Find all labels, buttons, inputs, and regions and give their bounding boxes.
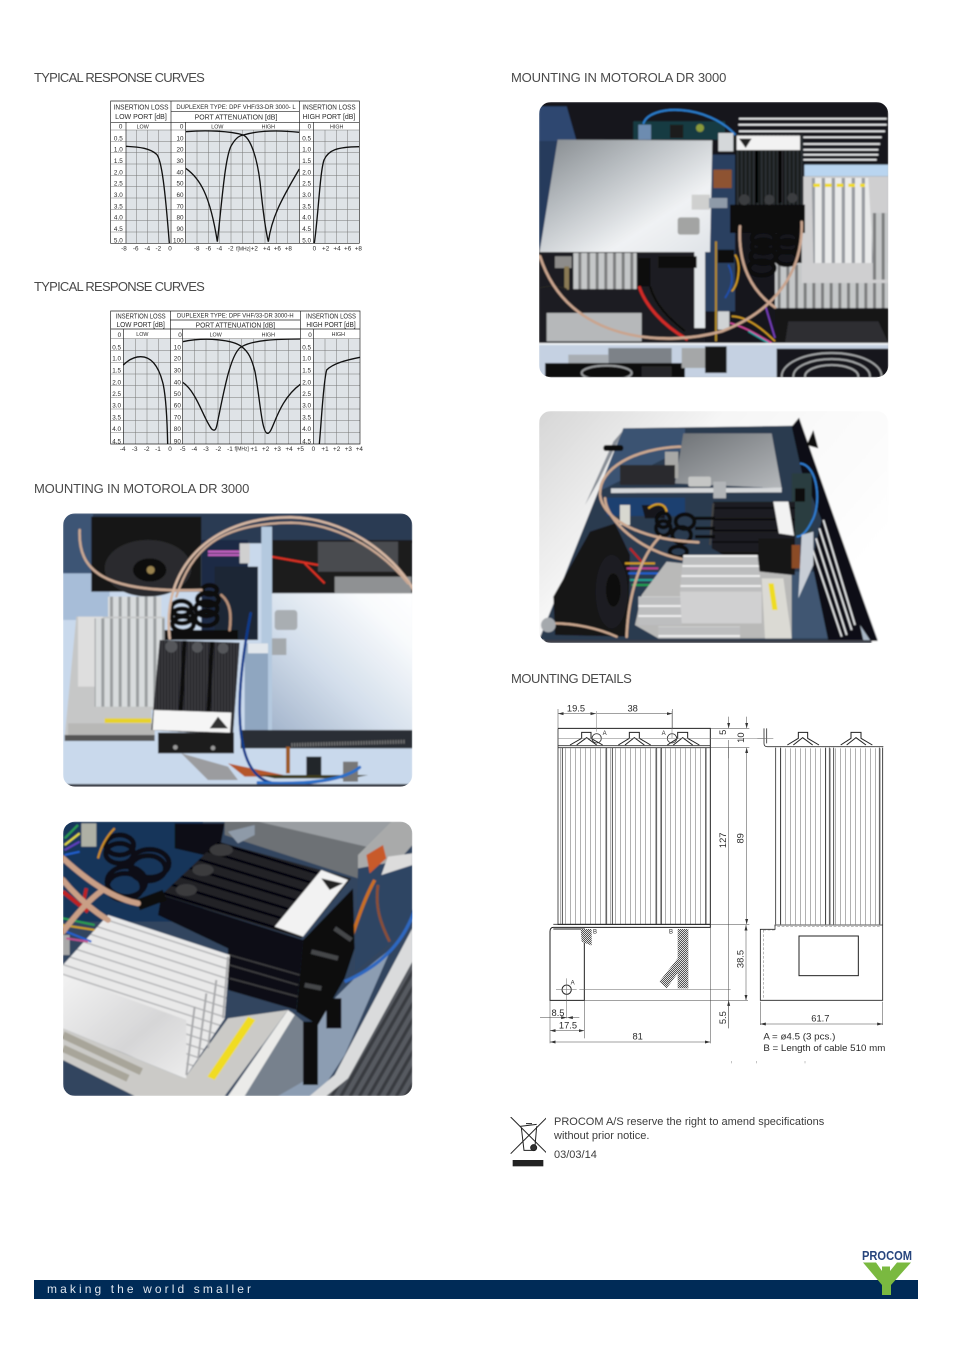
chart: response curves DPF VHF/33-DR 3000-L: 3.0 xyxy=(114,192,123,199)
cable: blue top xyxy=(643,110,737,136)
dimension labels: A xyxy=(571,980,575,986)
chart: response curves DPF VHF/33-DR 3000-L: 0 xyxy=(308,124,312,131)
chart: response curves DPF VHF/33-DR 3000-H: LOW xyxy=(136,332,149,338)
chart: response curves DPF VHF/33-DR 3000-L: 1.5 xyxy=(302,158,312,165)
logo: Procom xyxy=(862,1249,912,1295)
chart: response curves DPF VHF/33-DR 3000-H: 0 xyxy=(308,332,312,339)
chart: response curves DPF VHF/33-DR 3000-H: -2 xyxy=(216,446,222,453)
cables xyxy=(63,858,138,932)
chart: response curves DPF VHF/33-DR 3000-L: HIGH xyxy=(262,124,275,130)
chart: response curves DPF VHF/33-DR 3000-H: 10 xyxy=(174,344,181,351)
chart: response curves DPF VHF/33-DR 3000-H: HIGH xyxy=(332,332,345,338)
dimension labels: A xyxy=(662,731,666,737)
icon: WEEE crossed-out bin xyxy=(510,1117,546,1166)
chart: response curves DPF VHF/33-DR 3000-L: f[MHz] xyxy=(236,246,251,252)
chart: response curves DPF VHF/33-DR 3000-H: -5 xyxy=(180,446,186,453)
dimension labels: 81 xyxy=(632,1032,643,1042)
chart: response curves DPF VHF/33-DR 3000-H: -3 xyxy=(203,446,209,453)
dimension labels: 17.5 xyxy=(559,1020,577,1030)
chart: response curves DPF VHF/33-DR 3000-H: 0.5 xyxy=(112,344,122,351)
chart: response curves DPF VHF/33-DR 3000-L xyxy=(110,100,362,253)
chart: response curves DPF VHF/33-DR 3000-L: 2.5 xyxy=(302,181,312,188)
PCB xyxy=(633,121,725,140)
dimension labels: 89 xyxy=(736,833,746,844)
footer bar xyxy=(34,1280,918,1299)
rear panel xyxy=(539,344,888,378)
chart: response curves DPF VHF/33-DR 3000-H: 4.0 xyxy=(302,426,312,433)
cables xyxy=(553,447,698,637)
photo: duplexer mounted, top view xyxy=(63,513,412,787)
chart: response curves DPF VHF/33-DR 3000-L: 5.0 xyxy=(114,237,123,244)
chart: response curves DPF VHF/33-DR 3000-H: 0 xyxy=(312,446,316,453)
chart: response curves DPF VHF/33-DR 3000-H: 60 xyxy=(174,403,181,410)
chart: response curves DPF VHF/33-DR 3000-L: +4 xyxy=(333,246,341,253)
fan xyxy=(91,517,201,597)
cables xyxy=(581,929,592,946)
chassis xyxy=(539,426,878,640)
chart: response curves DPF VHF/33-DR 3000-H: 0.5 xyxy=(302,344,312,351)
heading: typical response curves 2: TYPICAL RESPONSE CURVES xyxy=(34,279,204,294)
cable: red xyxy=(639,286,688,340)
coils xyxy=(106,835,169,900)
fan xyxy=(785,310,888,342)
chart: response curves DPF VHF/33-DR 3000-H: HIGH xyxy=(262,332,275,338)
chart: response curves DPF VHF/33-DR 3000-H: -3 xyxy=(132,446,138,453)
chart: response curves DPF VHF/33-DR 3000-H: 80 xyxy=(174,426,181,433)
chart: response curves DPF VHF/33-DR 3000-H: 20 xyxy=(174,356,181,363)
chart: response curves DPF VHF/33-DR 3000-H: 1.5 xyxy=(302,368,312,375)
text block: legal notice: 03/03/14 xyxy=(554,1149,597,1161)
tagline: making the world smaller xyxy=(47,1282,254,1296)
chart: response curves DPF VHF/33-DR 3000-H: LOW PORT [dB] xyxy=(116,320,165,329)
chart: response curves DPF VHF/33-DR 3000-L: 10 xyxy=(176,135,184,142)
dimension labels: B xyxy=(669,930,673,936)
cables xyxy=(80,517,415,784)
chart: response curves DPF VHF/33-DR 3000-L: -8 xyxy=(121,246,127,253)
silver power supply xyxy=(540,140,727,328)
chart: response curves DPF VHF/33-DR 3000-L: 40 xyxy=(176,169,184,176)
fan xyxy=(553,523,630,637)
chart: response curves DPF VHF/33-DR 3000-L: 70 xyxy=(176,203,184,210)
cooling vents xyxy=(738,119,887,160)
chart: response curves DPF VHF/33-DR 3000-H: 3.5 xyxy=(112,414,122,421)
chart: response curves DPF VHF/33-DR 3000-L: 100 xyxy=(173,237,184,244)
heat sink xyxy=(65,597,165,741)
heat sink base xyxy=(635,562,792,638)
floor xyxy=(278,952,389,1096)
heading: mounting in Motorola DR 3000 (right): MOUNTING IN MOTOROLA DR 3000 xyxy=(511,70,726,85)
ribbon and rail xyxy=(245,1012,303,1096)
chart: response curves DPF VHF/33-DR 3000-H: +3 xyxy=(274,446,281,453)
chart: response curves DPF VHF/33-DR 3000-H: +3 xyxy=(345,446,352,453)
cable: blue xyxy=(345,910,415,982)
chart: response curves DPF VHF/33-DR 3000-L: INSERTION LOSS xyxy=(114,102,169,111)
chart: response curves DPF VHF/33-DR 3000-L: 3.5 xyxy=(114,203,123,210)
dimension labels: 10 xyxy=(736,732,746,743)
heat sink fins xyxy=(63,915,230,1078)
black plate xyxy=(539,250,705,343)
chart: response curves DPF VHF/33-DR 3000-L: DUPLEXER TYPE: DPF VHF/33-DR 3000- L xyxy=(176,105,296,111)
chart: response curves DPF VHF/33-DR 3000-H: 90 xyxy=(174,438,181,445)
chart: response curves DPF VHF/33-DR 3000-L: HIGH xyxy=(330,124,343,130)
heading: mounting details: MOUNTING DETAILS xyxy=(511,671,631,686)
chart: response curves DPF VHF/33-DR 3000-L: 0 xyxy=(180,124,184,131)
chart: response curves DPF VHF/33-DR 3000-H: f[MHz] xyxy=(234,447,249,453)
chart: response curves DPF VHF/33-DR 3000-L: 2.0 xyxy=(114,169,123,176)
chart: response curves DPF VHF/33-DR 3000-H: 40 xyxy=(174,379,181,386)
base edge xyxy=(543,640,872,643)
chart: response curves DPF VHF/33-DR 3000-H: 50 xyxy=(174,391,181,398)
chart: response curves DPF VHF/33-DR 3000-H: 2.5 xyxy=(302,391,312,398)
chart: response curves DPF VHF/33-DR 3000-H: 70 xyxy=(174,414,181,421)
chart: response curves DPF VHF/33-DR 3000-H: 1.0 xyxy=(302,356,312,363)
chart: response curves DPF VHF/33-DR 3000-H: +4 xyxy=(356,446,363,453)
coils xyxy=(171,585,219,631)
chart: response curves DPF VHF/33-DR 3000-H: HIGH PORT [dB] xyxy=(306,320,356,329)
chart: response curves DPF VHF/33-DR 3000-L: 2.0 xyxy=(302,169,312,176)
dimension labels: 5.5 xyxy=(718,1011,728,1024)
duplexer xyxy=(158,842,355,1025)
dimension labels: 5 xyxy=(718,730,728,735)
photo: duplexer and power supply, top view xyxy=(539,102,888,378)
dimension labels: 8.5 xyxy=(552,1008,564,1018)
heat sink xyxy=(680,555,762,623)
text block: legal notice: without prior notice. xyxy=(554,1130,649,1142)
chart: response curves DPF VHF/33-DR 3000-L: 1.0 xyxy=(114,147,123,154)
heat sink xyxy=(775,176,888,308)
chart: response curves DPF VHF/33-DR 3000-H: +2 xyxy=(262,446,270,453)
chart: response curves DPF VHF/33-DR 3000-H: 0 xyxy=(168,446,172,453)
coils xyxy=(656,513,694,557)
chart: response curves DPF VHF/33-DR 3000-H: 1.5 xyxy=(112,368,122,375)
chart: response curves DPF VHF/33-DR 3000-L: 0.5 xyxy=(302,135,312,142)
front view xyxy=(550,711,763,1018)
chart: response curves DPF VHF/33-DR 3000-L: 1.0 xyxy=(302,147,312,154)
chart: response curves DPF VHF/33-DR 3000-L: 4.5 xyxy=(114,226,123,233)
chart: response curves DPF VHF/33-DR 3000-L: +6 xyxy=(344,246,352,253)
chart: response curves DPF VHF/33-DR 3000-H: -4 xyxy=(192,446,198,453)
fins xyxy=(573,253,637,289)
heading: mounting in Motorola DR 3000 (left): MOUNTING IN MOTOROLA DR 3000 xyxy=(34,481,249,496)
chart: response curves DPF VHF/33-DR 3000-L: 3.0 xyxy=(302,192,312,199)
duplexer xyxy=(730,135,805,233)
heading: typical response curves 1: TYPICAL RESPONSE CURVES xyxy=(34,70,204,85)
chart: response curves DPF VHF/33-DR 3000-L: 0 xyxy=(119,124,123,131)
chart: response curves DPF VHF/33-DR 3000-H: 2.0 xyxy=(112,379,122,386)
text block: legal notice: PROCOM A/S reserve the right to amend specifications xyxy=(554,1116,824,1128)
chart: response curves DPF VHF/33-DR 3000-L: -6 xyxy=(133,246,139,253)
chart: response curves DPF VHF/33-DR 3000-H: 0 xyxy=(118,332,122,339)
chart: response curves DPF VHF/33-DR 3000-H: 3.0 xyxy=(302,403,312,410)
chart: response curves DPF VHF/33-DR 3000-L: 4.5 xyxy=(302,226,312,233)
note: A and B legend xyxy=(763,1032,886,1053)
technical drawing: mounting details xyxy=(540,704,886,1064)
dimension labels: 19.5 xyxy=(567,704,585,714)
side view xyxy=(757,728,883,1000)
chart: response curves DPF VHF/33-DR 3000-L: 90 xyxy=(176,226,184,233)
dimension labels: B xyxy=(593,930,597,936)
cooling vents xyxy=(356,862,412,924)
coils xyxy=(749,231,798,275)
chart: response curves DPF VHF/33-DR 3000-L: +8 xyxy=(355,246,362,253)
chart: response curves DPF VHF/33-DR 3000-L: +4 xyxy=(263,246,271,253)
chart: response curves DPF VHF/33-DR 3000-L: 0 xyxy=(168,246,172,253)
chart: response curves DPF VHF/33-DR 3000-L: 20 xyxy=(176,147,184,154)
PCB xyxy=(607,498,685,525)
logo: Procom: PROCOM xyxy=(862,1249,912,1263)
chart: response curves DPF VHF/33-DR 3000-L: 4.0 xyxy=(302,215,312,222)
chart: response curves DPF VHF/33-DR 3000-H: LOW xyxy=(210,332,223,338)
chart: response curves DPF VHF/33-DR 3000-H: 30 xyxy=(174,368,181,375)
duplexer xyxy=(710,502,795,575)
chart: response curves DPF VHF/33-DR 3000-H: -1 xyxy=(155,446,161,453)
screws xyxy=(570,732,699,745)
chart: response curves DPF VHF/33-DR 3000-H: -1 xyxy=(227,446,233,453)
dimension labels: A xyxy=(603,731,607,737)
chart: response curves DPF VHF/33-DR 3000-H: INSERTION LOSS xyxy=(306,311,356,320)
chart: response curves DPF VHF/33-DR 3000-L: 0.5 xyxy=(114,135,123,142)
chart: response curves DPF VHF/33-DR 3000-H: 4.0 xyxy=(112,426,122,433)
chart: response curves DPF VHF/33-DR 3000-H: INSERTION LOSS xyxy=(116,311,166,320)
chart: response curves DPF VHF/33-DR 3000-L: +2 xyxy=(322,246,330,253)
chart: response curves DPF VHF/33-DR 3000-L: INSERTION LOSS xyxy=(302,102,356,111)
chart: response curves DPF VHF/33-DR 3000-H: +5 xyxy=(297,446,304,453)
dimensions xyxy=(540,709,883,1063)
chart: response curves DPF VHF/33-DR 3000-L: -2 xyxy=(228,246,234,253)
wires xyxy=(625,504,667,585)
text block: legal notice xyxy=(554,1116,824,1161)
chart: response curves DPF VHF/33-DR 3000-H: 4.5 xyxy=(302,438,312,445)
chart: response curves DPF VHF/33-DR 3000-H: DUPLEXER TYPE: DPF VHF/33-DR 3000-H xyxy=(177,313,294,319)
dimension labels: 38 xyxy=(627,704,638,714)
chart: response curves DPF VHF/33-DR 3000-L: +8 xyxy=(285,246,292,253)
chart: response curves DPF VHF/33-DR 3000-H: -2 xyxy=(144,446,150,453)
chart: response curves DPF VHF/33-DR 3000-H: 2.0 xyxy=(302,379,312,386)
heat sink base xyxy=(63,1010,295,1096)
chart: response curves DPF VHF/33-DR 3000-H xyxy=(110,310,363,453)
chart: response curves DPF VHF/33-DR 3000-L: -2 xyxy=(156,246,162,253)
chart: response curves DPF VHF/33-DR 3000-L: 60 xyxy=(176,192,184,199)
chart: response curves DPF VHF/33-DR 3000-L: 50 xyxy=(176,181,184,188)
photo: duplexer mounted, rear perspective xyxy=(539,411,878,643)
chart: response curves DPF VHF/33-DR 3000-L: 4.0 xyxy=(114,215,123,222)
note: A and B legend: B = Length of cable 510 mm xyxy=(763,1043,886,1053)
chart: response curves DPF VHF/33-DR 3000-H: 1.0 xyxy=(112,356,122,363)
chart: response curves DPF VHF/33-DR 3000-L: PORT ATTENUATION [dB] xyxy=(195,112,277,121)
chart: response curves DPF VHF/33-DR 3000-H: +1 xyxy=(321,446,329,453)
chart: response curves DPF VHF/33-DR 3000-H: PORT ATTENUATION [dB] xyxy=(196,320,275,329)
chart: response curves DPF VHF/33-DR 3000-H: 4.5 xyxy=(112,438,122,445)
chart: response curves DPF VHF/33-DR 3000-L: -4 xyxy=(217,246,223,253)
chart: response curves DPF VHF/33-DR 3000-L: -8 xyxy=(194,246,200,253)
cable: blue xyxy=(797,463,817,537)
chart: response curves DPF VHF/33-DR 3000-L: 0 xyxy=(313,246,317,253)
chart: response curves DPF VHF/33-DR 3000-H: 3.0 xyxy=(112,403,122,410)
chart: response curves DPF VHF/33-DR 3000-L: +6 xyxy=(274,246,281,253)
dimension labels: 61.7 xyxy=(811,1014,829,1024)
chart: response curves DPF VHF/33-DR 3000-H: 3.5 xyxy=(302,414,312,421)
chart: response curves DPF VHF/33-DR 3000-H: 0 xyxy=(178,332,182,339)
dimension labels xyxy=(552,704,829,1042)
right wall xyxy=(310,928,412,1096)
chart: response curves DPF VHF/33-DR 3000-H: 2.5 xyxy=(112,391,122,398)
chart: response curves DPF VHF/33-DR 3000-L: -6 xyxy=(206,246,212,253)
photo: duplexer mounted, angled close-up xyxy=(63,822,412,1096)
chart: response curves DPF VHF/33-DR 3000-L: HIGH PORT [dB] xyxy=(303,112,355,121)
silver power supply xyxy=(611,433,782,498)
chart: response curves DPF VHF/33-DR 3000-L: LOW xyxy=(211,124,224,130)
chart: response curves DPF VHF/33-DR 3000-L: 1.5 xyxy=(114,158,123,165)
dimension labels: 127 xyxy=(718,833,728,848)
wires xyxy=(725,255,775,343)
chart: response curves DPF VHF/33-DR 3000-H: +2 xyxy=(333,446,341,453)
duplexer xyxy=(151,640,240,753)
chart: response curves DPF VHF/33-DR 3000-L: +2 xyxy=(251,246,258,253)
chart: response curves DPF VHF/33-DR 3000-H: +4 xyxy=(285,446,293,453)
dimension labels: 38.5 xyxy=(736,950,746,968)
chart: response curves DPF VHF/33-DR 3000-L: 5.0 xyxy=(302,237,312,244)
wires xyxy=(63,825,115,942)
chart: response curves DPF VHF/33-DR 3000-L: 2.5 xyxy=(114,181,123,188)
note: A and B legend: A = ø4.5 (3 pcs.) xyxy=(763,1032,835,1042)
chart: response curves DPF VHF/33-DR 3000-L: 80 xyxy=(176,215,184,222)
right wall xyxy=(792,418,878,641)
rail xyxy=(245,527,272,740)
chart: response curves DPF VHF/33-DR 3000-H: -4 xyxy=(120,446,126,453)
standoffs xyxy=(303,998,341,1085)
chart: response curves DPF VHF/33-DR 3000-L: LOW PORT [dB] xyxy=(115,112,167,121)
silver box xyxy=(271,593,412,730)
chart: response curves DPF VHF/33-DR 3000-L: 3.5 xyxy=(302,203,312,210)
label xyxy=(547,313,642,341)
chart: response curves DPF VHF/33-DR 3000-L: -4 xyxy=(145,246,151,253)
cables xyxy=(540,222,802,338)
chart: response curves DPF VHF/33-DR 3000-H: +1 xyxy=(250,446,258,453)
chart: response curves DPF VHF/33-DR 3000-L: LOW xyxy=(137,124,150,130)
chart: response curves DPF VHF/33-DR 3000-L: 30 xyxy=(176,158,184,165)
